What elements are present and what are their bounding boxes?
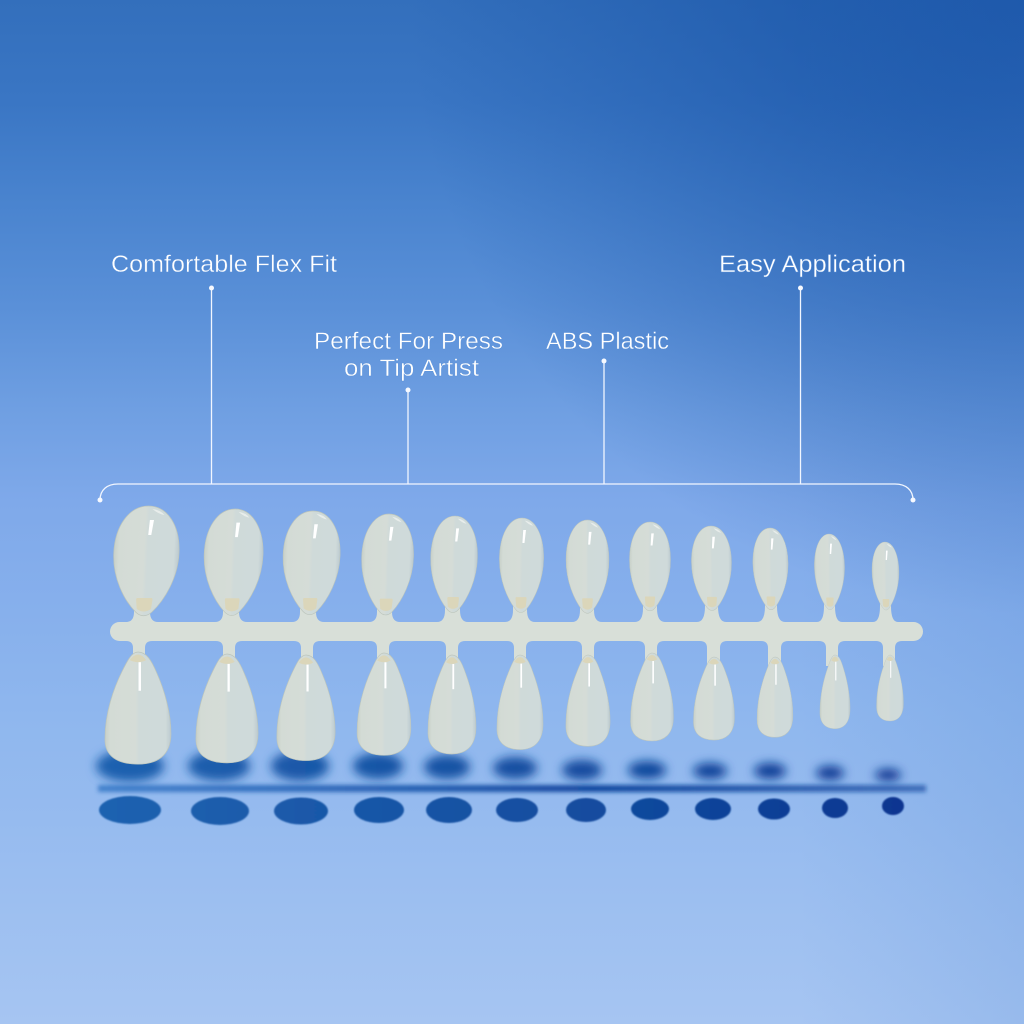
runner bar with stems [110, 598, 923, 668]
label: ABS Plastic: ABS Plastic [546, 328, 669, 355]
upper blurred shadows [96, 750, 901, 782]
bracket with callout lines [98, 286, 916, 502]
nail sheet [105, 506, 923, 764]
top row of nails [111, 506, 900, 616]
bar shadow [98, 785, 926, 792]
label: Easy Application: Easy Application [719, 251, 906, 278]
label: Perfect For Press on Tip Artist: Perfect For Press [314, 328, 503, 355]
label: Comfortable Flex Fit: Comfortable Flex Fit [111, 251, 337, 278]
label: Perfect For Press on Tip Artist: on Tip Artist [344, 355, 479, 382]
lower ellipse shadows [99, 796, 904, 825]
cast shadows under the nail sheet [96, 750, 926, 825]
bottom row of nails [105, 652, 903, 764]
label: Perfect For Press on Tip Artist [314, 328, 503, 382]
